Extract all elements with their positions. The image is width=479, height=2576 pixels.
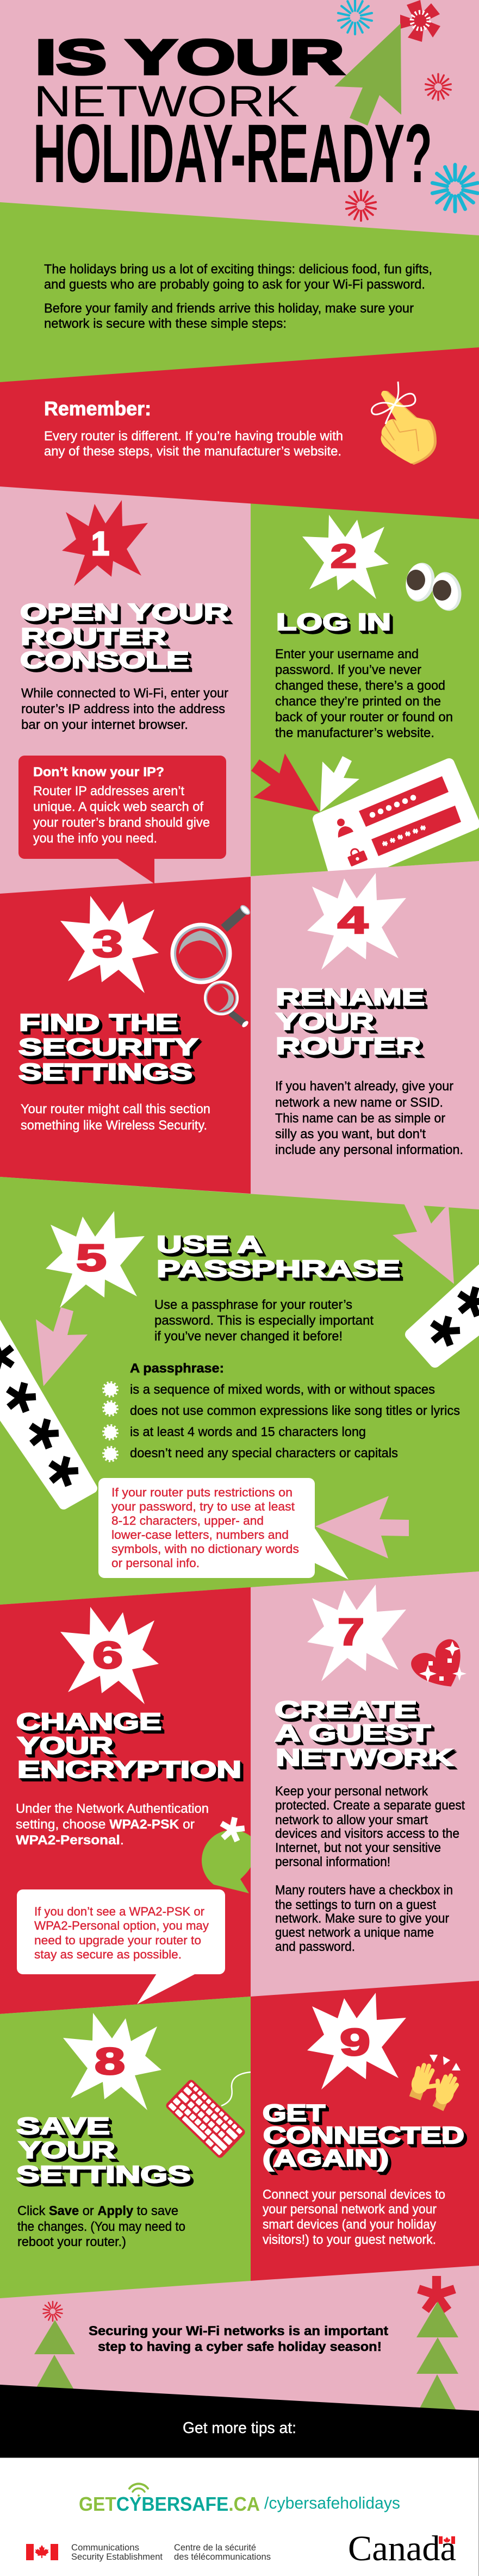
icon: keyboard	[165, 2072, 251, 2159]
icon: login card	[318, 764, 475, 883]
badge: number 7: 7	[338, 1611, 364, 1653]
panel: step 1 open your router console	[18, 500, 229, 884]
panel: step 8 save your settings	[0, 1997, 251, 2298]
heading: LOG IN	[276, 609, 391, 635]
body text: include any personal information.	[275, 1143, 463, 1157]
body text: Keep your personal network	[275, 1784, 428, 1799]
badge: number 6	[60, 1607, 159, 1704]
heading	[275, 1696, 453, 1771]
body text: and password.	[275, 1939, 355, 1954]
body text: Click Save or Apply to save	[17, 2204, 178, 2218]
callout: WPA2 upgrade note: If you don’t see a WPA2-PSK or	[34, 1905, 204, 1918]
body text: network to allow your smart	[275, 1813, 428, 1827]
callout: password restrictions note: If your router puts restrictions on	[111, 1486, 293, 1499]
heading: CHANGE	[16, 1708, 161, 1735]
title: NETWORK	[34, 77, 300, 126]
intro text: and guests who are probably going to ask for your Wi-Fi password.	[44, 277, 425, 292]
badge: number 9	[307, 1993, 406, 2090]
body text: setting, choose WPA2-PSK or	[16, 1817, 195, 1832]
heading: RENAME	[276, 984, 425, 1011]
icon: small tree with burst	[34, 2301, 75, 2390]
body text: if you’ve never changed it before!	[154, 1329, 343, 1344]
agency name: Security Establishment	[71, 2552, 163, 2562]
callout: don't know your IP: Don’t know your IP?	[33, 765, 164, 779]
agency name: Centre de la sécurité	[174, 2543, 256, 2553]
logo: canadian flag	[26, 2544, 58, 2560]
body text: While connected to Wi-Fi, enter your	[21, 686, 228, 701]
body text: Internet, but not your sensitive	[275, 1841, 441, 1855]
body text: the settings to turn on a guest	[275, 1898, 436, 1912]
icon: password card top right	[410, 1262, 479, 1362]
callout: don't know your IP: your router’s brand should give	[33, 815, 210, 830]
agency name: Communications	[71, 2543, 139, 2553]
callout: don't know your IP: unique. A quick web search of	[33, 800, 203, 814]
body text: chance they’re printed on the	[275, 694, 441, 709]
body text: Under the Network Authentication	[16, 1801, 209, 1816]
remember heading: Remember:	[44, 397, 151, 420]
heading: PASSPHRASE	[157, 1256, 400, 1282]
agency name	[71, 2543, 271, 2562]
icon: blue snowflake burst	[338, 0, 372, 34]
heading	[18, 1009, 198, 1086]
icon: red bow star	[400, 0, 440, 42]
icon: red cursor arrow	[251, 753, 320, 812]
heading: FIND THE	[19, 1009, 178, 1036]
body text: back of your router or found on	[275, 710, 453, 725]
badge: number 4: 4	[338, 899, 368, 941]
body text	[275, 647, 453, 740]
body text: devices and visitors access to the	[275, 1826, 459, 1841]
icon: finger tied with a string	[372, 382, 437, 465]
heading	[16, 1708, 241, 1783]
panel: header	[33, 0, 478, 211]
callout: password restrictions note: your password, try to use at least	[111, 1500, 295, 1513]
panel: step 2 background	[251, 489, 479, 876]
icon: red burst	[426, 74, 451, 100]
heading: OPEN YOUR	[20, 599, 229, 626]
body text: the manufacturer’s website.	[275, 726, 434, 740]
heading	[20, 599, 229, 673]
heading	[157, 1231, 400, 1282]
body text: visitors!) to your guest network.	[263, 2232, 436, 2247]
passphrase list: doesn’t need any special characters or capitals	[130, 1446, 398, 1461]
badge: number 3	[60, 896, 159, 993]
callout: WPA2 upgrade note	[17, 1889, 225, 2004]
passphrase list: does not use common expressions like song titles or lyrics	[130, 1404, 460, 1418]
heading	[16, 2113, 191, 2188]
panel: intro	[0, 190, 479, 382]
callout: don't know your IP: you the info you need.	[33, 831, 157, 846]
badge: number 5	[46, 1211, 145, 1308]
icon: tall tree with star	[416, 2276, 458, 2413]
panel: black tips band	[0, 2385, 479, 2458]
badge: number 8	[63, 2013, 161, 2110]
body text: bar on your internet browser.	[21, 718, 188, 732]
heading: SETTINGS	[16, 2161, 191, 2188]
body text: Use a passphrase for your router’s	[154, 1298, 352, 1312]
badge: number 5: 5	[76, 1237, 107, 1279]
icon: pink arrow pointing left	[315, 1496, 409, 1558]
body text: This name can be as simple or	[275, 1111, 445, 1126]
badge: number 7	[307, 1585, 406, 1681]
title: IS YOUR	[35, 30, 344, 85]
body text: network. Make sure to give your	[275, 1911, 449, 1926]
badge: number 1: 1	[91, 525, 109, 562]
body text	[275, 1784, 465, 1954]
passphrase list: is a sequence of mixed words, with or without spaces	[130, 1382, 435, 1397]
passphrase list	[103, 1361, 460, 1461]
body text: something like Wireless Security.	[21, 1118, 207, 1133]
icon: pink arrow left	[36, 1307, 88, 1386]
heading: USE A	[157, 1231, 263, 1258]
body text: smart devices (and your holiday	[263, 2217, 436, 2232]
panel: step 6 change your encryption	[0, 1587, 251, 2014]
panel: remember	[0, 347, 479, 519]
body text: If you haven’t already, give your	[275, 1079, 453, 1094]
intro text	[44, 262, 432, 331]
callout: password restrictions note: 8-12 characters, upper- and	[111, 1514, 264, 1527]
heading: A GUEST	[275, 1720, 431, 1747]
heading	[263, 2100, 464, 2172]
heading: YOUR	[276, 1008, 374, 1035]
heading: YOUR	[17, 1732, 113, 1759]
badge: number 6: 6	[92, 1634, 123, 1676]
panel: step 7 create a guest network	[251, 1571, 479, 1997]
body text: reboot your router.)	[17, 2235, 126, 2249]
heading: YOUR	[18, 2137, 115, 2163]
body text	[275, 1079, 463, 1157]
remember text: any of these steps, visit the manufacturer’s website.	[44, 444, 341, 459]
logo: getcybersafe url: /cybersafeholidays	[264, 2493, 400, 2512]
body text: password. If you’ve never	[275, 663, 421, 677]
body text	[21, 1102, 210, 1133]
callout: password restrictions note: lower-case letters, numbers and	[111, 1528, 289, 1542]
icon: green speech bubble	[202, 1815, 251, 1893]
body text: guest network a unique name	[275, 1925, 434, 1940]
icon: white cursor arrow	[320, 756, 359, 812]
body text: Many routers have a checkbox in	[275, 1883, 453, 1898]
icon: sparkly heart	[408, 1636, 474, 1699]
heading: ROUTER	[21, 623, 166, 650]
heading: CONNECTED	[263, 2122, 464, 2149]
panel: step 9 get connected again	[251, 1981, 479, 2281]
body text: Connect your personal devices to	[263, 2187, 445, 2202]
closing text: step to having a cyber safe holiday season!	[98, 2340, 382, 2354]
body text: protected. Create a separate guest	[275, 1798, 465, 1813]
logo: getcybersafe url: GETCYBERSAFE.CA	[79, 2493, 260, 2515]
logo: Canada wordmark: Canada	[348, 2529, 456, 2568]
body text: network a new name or SSID.	[275, 1095, 443, 1110]
badge: number 3: 3	[92, 922, 123, 965]
panel: step 4 rename your router	[251, 861, 479, 1209]
passphrase list: is at least 4 words and 15 characters long	[130, 1425, 366, 1439]
body text: changed these, there’s a good	[275, 678, 445, 693]
body text: Enter your username and	[275, 647, 419, 662]
callout: WPA2 upgrade note: WPA2-Personal option, you may	[34, 1919, 209, 1932]
body text: WPA2-Personal .	[16, 1833, 124, 1848]
body text	[21, 686, 228, 732]
body text	[154, 1298, 374, 1344]
heading: ROUTER	[276, 1033, 421, 1059]
body text: router’s IP address into the address	[21, 702, 225, 716]
panel: footer	[0, 2458, 479, 2576]
heading: CREATE	[275, 1696, 417, 1723]
icon: red burst over intro band	[346, 190, 376, 221]
bullet stars	[103, 1382, 117, 1461]
heading: GET	[263, 2100, 325, 2126]
callout: don't know your IP	[18, 756, 226, 884]
icon: pink arrow top right	[393, 1202, 454, 1284]
heading: SECURITY	[18, 1034, 198, 1061]
passphrase list: A passphrase:	[130, 1361, 224, 1376]
intro text: Before your family and friends arrive this holiday, make sure your	[44, 301, 414, 316]
badge: number 2: 2	[331, 538, 357, 575]
callout: password restrictions note	[98, 1478, 349, 1580]
body text: your personal network and your	[263, 2202, 437, 2217]
badge: number 9: 9	[340, 2021, 370, 2063]
panel: closing message	[34, 2276, 458, 2413]
remember text: Every router is different. If you’re having trouble with	[44, 429, 343, 444]
heading: (AGAIN)	[263, 2145, 389, 2172]
tips text: Get more tips at:	[183, 2419, 296, 2437]
closing text: Securing your Wi-Fi networks is an important	[89, 2324, 388, 2338]
body text: silly as you want, but don't	[275, 1127, 426, 1142]
badge: number 1	[62, 500, 148, 586]
callout: WPA2 upgrade note: need to upgrade your router to	[34, 1933, 201, 1947]
callout: don't know your IP: Router IP addresses aren’t	[33, 784, 184, 799]
heading	[276, 984, 425, 1059]
agency name: des télécommunications	[174, 2552, 271, 2562]
icon: eyes	[402, 560, 465, 614]
callout: WPA2 upgrade note: stay as secure as possible.	[34, 1948, 182, 1961]
heading: ENCRYPTION	[17, 1756, 241, 1783]
icon: large blue burst	[432, 165, 478, 211]
body text	[263, 2187, 445, 2247]
logo: wifi arcs	[129, 2484, 148, 2497]
badge: number 2	[302, 515, 389, 599]
panel: step 3 find the security settings	[0, 877, 251, 1194]
icon: password card left	[0, 1318, 92, 1505]
callout: password restrictions note: symbols, with no dictionary words	[111, 1542, 299, 1556]
heading: SAVE	[16, 2113, 110, 2140]
heading: CONSOLE	[20, 647, 189, 673]
body text: Your router might call this section	[21, 1102, 210, 1117]
logo: getcybersafe url	[79, 2493, 400, 2515]
callout: password restrictions note: or personal info.	[111, 1556, 200, 1570]
body text	[16, 1801, 209, 1848]
remember text	[44, 429, 343, 459]
body text: password. This is especially important	[154, 1313, 374, 1328]
intro text: The holidays bring us a lot of exciting things: delicious food, fun gifts,	[44, 262, 432, 277]
closing text	[89, 2324, 388, 2354]
badge: number 4	[307, 873, 406, 970]
badge: number 8: 8	[95, 2040, 125, 2082]
body text: the changes. (You may need to	[17, 2219, 185, 2234]
heading: NETWORK	[276, 1744, 453, 1771]
title	[33, 30, 432, 200]
heading: SETTINGS	[18, 1059, 192, 1086]
panel: step 5 use a passphrase	[0, 1177, 479, 1605]
icon: magnifying glasses	[172, 904, 251, 1028]
panel: step 2 log in	[251, 515, 475, 883]
body text	[17, 2204, 185, 2249]
icon: green cursor arrow	[334, 23, 401, 126]
intro text: network is secure with these simple steps:	[44, 316, 287, 331]
body text: personal information!	[275, 1855, 390, 1869]
icon: high five hands	[407, 2055, 461, 2112]
